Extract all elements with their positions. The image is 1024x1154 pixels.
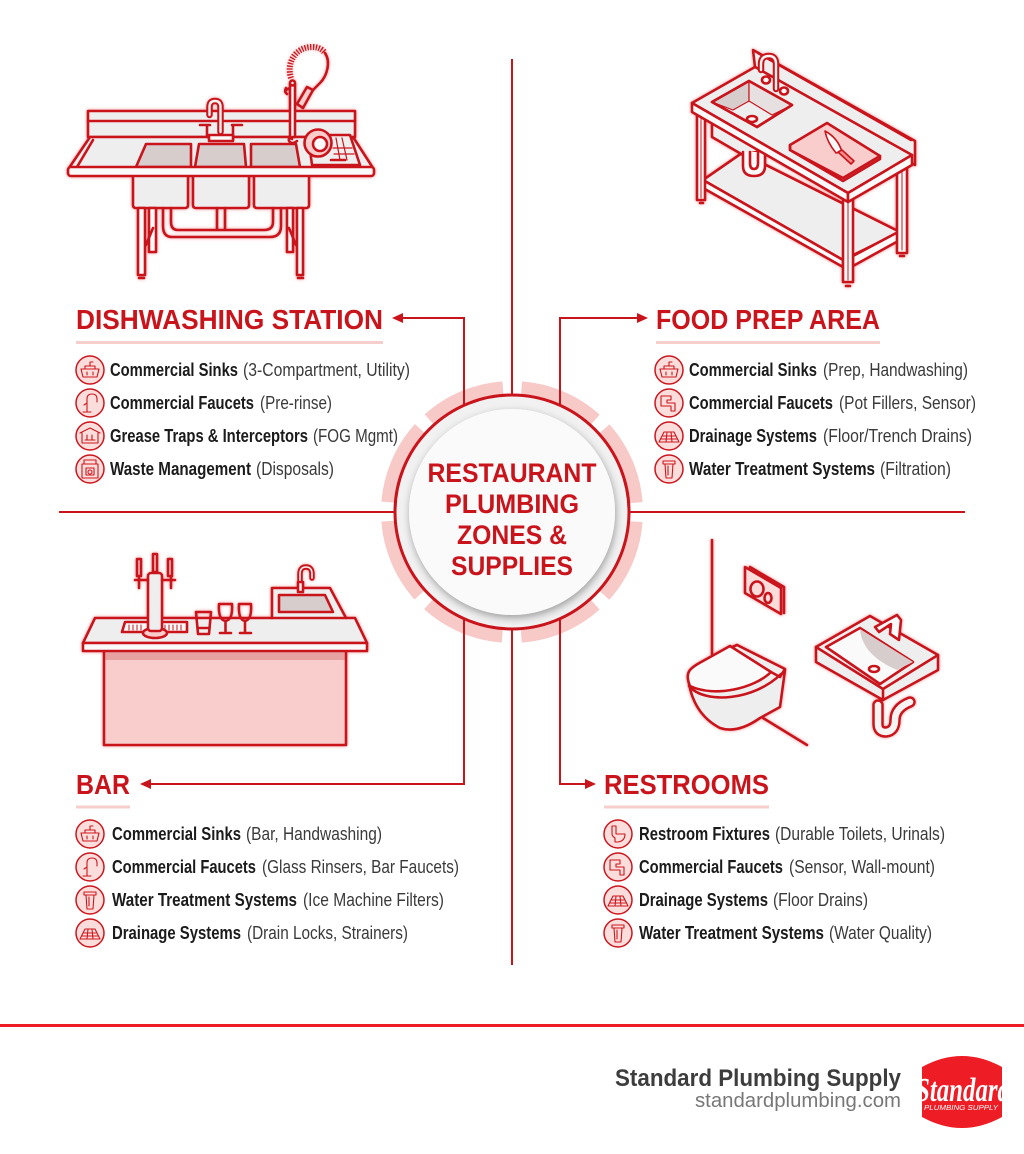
dish rack (304, 130, 360, 165)
list item: commercial faucets (76, 389, 332, 417)
list item: drainage systems: (Floor Drains) (773, 890, 868, 910)
list item: restroom fixtures (604, 820, 945, 848)
illustration: bar counter (83, 554, 367, 745)
list item: water treatment systems (655, 455, 951, 483)
logo: PLUMBING SUPPLY (924, 1103, 999, 1112)
center title: PLUMBING (445, 489, 579, 519)
list item: commercial faucets (604, 853, 935, 881)
footer rule (0, 1024, 1024, 1027)
list item: commercial sinks: (Bar, Handwashing) (246, 824, 382, 844)
faucet (200, 101, 242, 141)
divider lines (59, 59, 965, 965)
list item: drainage systems (76, 919, 408, 947)
list item: water treatment systems: (Filtration) (880, 459, 951, 479)
arrow: to restrooms (560, 620, 596, 789)
list item: commercial faucets: (Sensor, Wall-mount) (789, 857, 935, 877)
heading: dishwashing station: DISHWASHING STATION (76, 304, 383, 335)
list item: water treatment systems: Water Treatment Systems (689, 459, 875, 479)
panel: dishwashing station (76, 304, 410, 483)
center hub (395, 395, 629, 629)
list item: water treatment systems: Water Treatment Systems (112, 890, 297, 910)
list item: commercial faucets: (Glass Rinsers, Bar Faucets) (262, 857, 459, 877)
illustration: food prep table (692, 50, 915, 286)
list item: commercial sinks: (Prep, Handwashing) (823, 360, 968, 380)
list item: commercial sinks: (3-Compartment, Utility) (243, 360, 410, 380)
heading: food prep area: FOOD PREP AREA (656, 304, 880, 335)
heading: bar: BAR (76, 769, 130, 800)
list item: commercial sinks: Commercial Sinks (110, 360, 238, 380)
heading: restrooms: RESTROOMS (604, 769, 769, 800)
list item: drainage systems: Drainage Systems (689, 426, 817, 446)
list item: water treatment systems (76, 886, 444, 914)
list item: water treatment systems (604, 919, 932, 947)
list item: commercial sinks (76, 356, 410, 384)
list item: commercial faucets (655, 389, 976, 417)
list item: drainage systems: (Floor/Trench Drains) (823, 426, 972, 446)
list item: waste management: (Disposals) (256, 459, 334, 479)
list item: commercial sinks (655, 356, 968, 384)
logo (922, 1056, 1002, 1128)
center title: SUPPLIES (451, 551, 573, 581)
list item: commercial faucets: Commercial Faucets (689, 393, 833, 413)
list item: drainage systems: Drainage Systems (112, 923, 241, 943)
arrow: to bar (140, 620, 464, 789)
footer brand text: standardplumbing.com (695, 1090, 901, 1112)
list item: commercial sinks (76, 820, 382, 848)
list item: drainage systems: Drainage Systems (639, 890, 768, 910)
list item: grease traps: (FOG Mgmt) (313, 426, 398, 446)
list item: commercial faucets (76, 853, 459, 881)
list item: water treatment systems: (Water Quality) (829, 923, 932, 943)
illustration: restroom fixtures (688, 540, 938, 745)
list item: restroom fixtures: Restroom Fixtures (639, 824, 770, 844)
list item: waste management (76, 455, 334, 483)
list item: drainage systems (655, 422, 972, 450)
arrow: to dishwashing station (392, 313, 464, 405)
list item: water treatment systems: (Ice Machine Filters) (303, 890, 444, 910)
list item: commercial faucets: (Pre-rinse) (260, 393, 332, 413)
center title (428, 458, 597, 581)
list item: commercial faucets: Commercial Faucets (112, 857, 256, 877)
list item: grease traps: Grease Traps & Interceptors (110, 426, 308, 446)
panel: bar (76, 769, 459, 947)
list item: drainage systems (604, 886, 868, 914)
list item: commercial sinks: Commercial Sinks (112, 824, 241, 844)
pre-rinse sprayer (285, 47, 328, 143)
illustration: three-compartment dishwashing sink (68, 47, 374, 278)
footer brand text (615, 1065, 902, 1112)
list item: commercial faucets: Commercial Faucets (639, 857, 783, 877)
list item: drainage systems: (Drain Locks, Strainers) (247, 923, 408, 943)
list item: waste management: Waste Management (110, 459, 251, 479)
center ring segments (379, 379, 645, 645)
panel: restrooms (604, 769, 945, 947)
panel: food prep area (655, 304, 976, 483)
center title: RESTAURANT (428, 458, 597, 488)
center title: ZONES & (457, 520, 567, 550)
list item: commercial faucets: (Pot Fillers, Sensor) (839, 393, 976, 413)
list item: grease traps (76, 422, 398, 450)
list item: commercial faucets: Commercial Faucets (110, 393, 254, 413)
footer brand text: Standard Plumbing Supply (615, 1065, 902, 1092)
list item: water treatment systems: Water Treatment Systems (639, 923, 824, 943)
list item: commercial sinks: Commercial Sinks (689, 360, 817, 380)
arrow: to food prep area (560, 313, 648, 405)
list item: restroom fixtures: (Durable Toilets, Urinals) (775, 824, 945, 844)
